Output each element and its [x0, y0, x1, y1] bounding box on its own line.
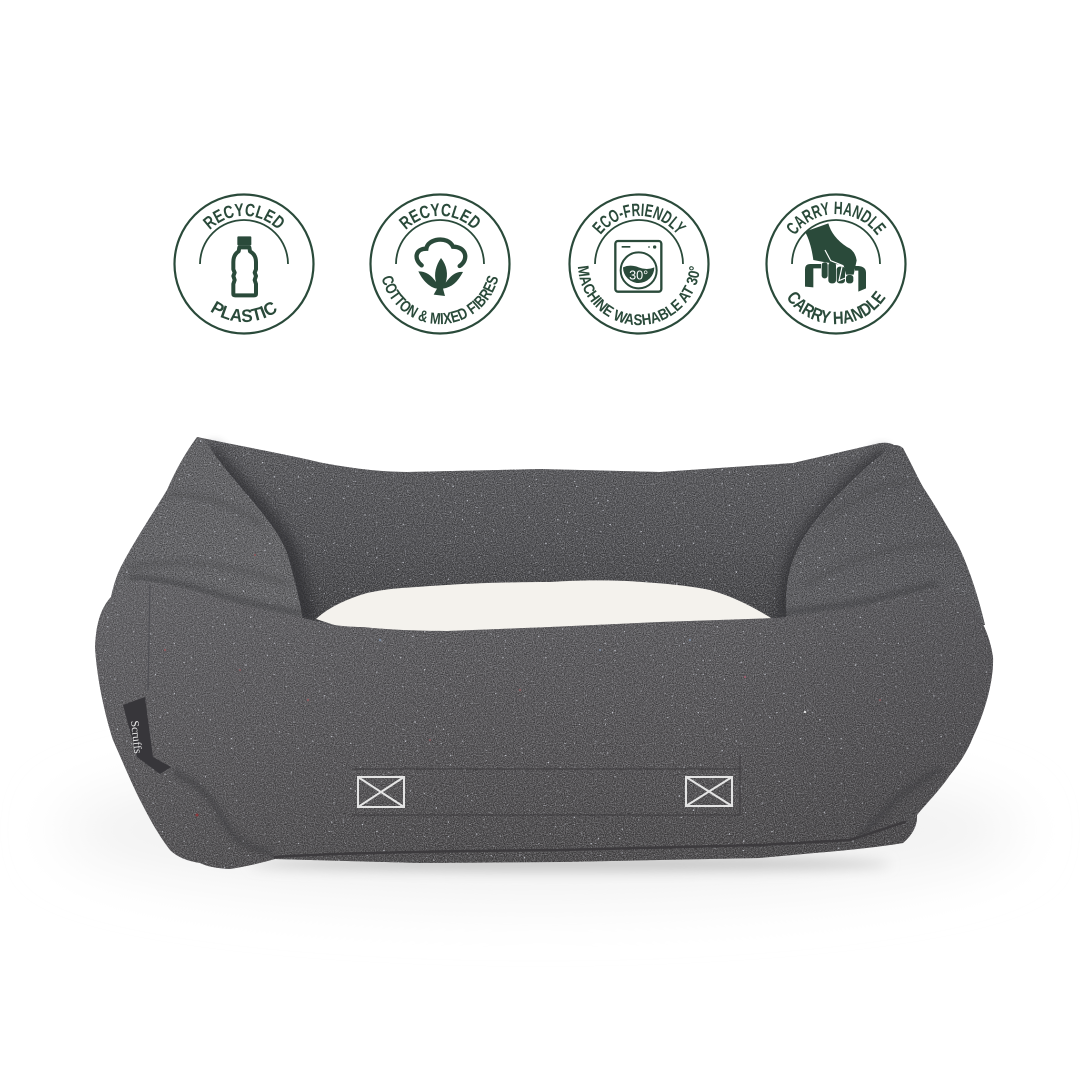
stitching: left cross box: [358, 777, 404, 807]
badge: eco-friendly machine washable: ECO-FRIENDLY: [592, 204, 687, 234]
bed cushion: [316, 580, 776, 640]
icon: cotton plant: [417, 240, 465, 296]
badge: recycled plastic: RECYCLED: [202, 203, 284, 230]
badge: recycled cotton and mixed fibres: [369, 193, 511, 335]
badge: eco-friendly machine washable: MACHINE WASHABLE AT 30°: [578, 266, 700, 326]
stitching: right cross box: [686, 777, 732, 806]
icon: washing machine: 30°: [629, 268, 648, 282]
badge: carry handle: [765, 193, 907, 335]
arm crease shadow: [130, 578, 937, 614]
badge: recycled cotton and mixed fibres: COTTON & MIXED FIBRES: [382, 276, 498, 324]
left arm cushion: [108, 437, 303, 620]
badge: recycled cotton and mixed fibres: RECYCLED: [398, 203, 480, 230]
front panel: [95, 580, 993, 869]
speckles: [164, 554, 881, 816]
brand tag: [123, 697, 171, 774]
badge: carry handle: CARRY HANDLE: [788, 290, 886, 324]
badge: recycled plastic: PLASTIC: [210, 300, 276, 322]
icon: plastic bottle: [233, 236, 256, 295]
badge: carry handle: CARRY HANDLE: [787, 202, 886, 236]
badge: eco-friendly machine washable: [568, 193, 710, 335]
back wall: [197, 437, 900, 630]
dog bed: [95, 437, 993, 869]
arm fold shadows: [128, 480, 950, 585]
front shading: [148, 585, 940, 857]
brand tag: Scruffs: [128, 720, 143, 755]
right arm cushion: [786, 445, 985, 625]
ground shadow: [60, 760, 1020, 900]
icon: hand gripping handle: [805, 223, 866, 292]
inner wall shadow: [208, 450, 888, 622]
carry handle strap: [352, 755, 740, 815]
badge: recycled plastic: [173, 193, 315, 335]
